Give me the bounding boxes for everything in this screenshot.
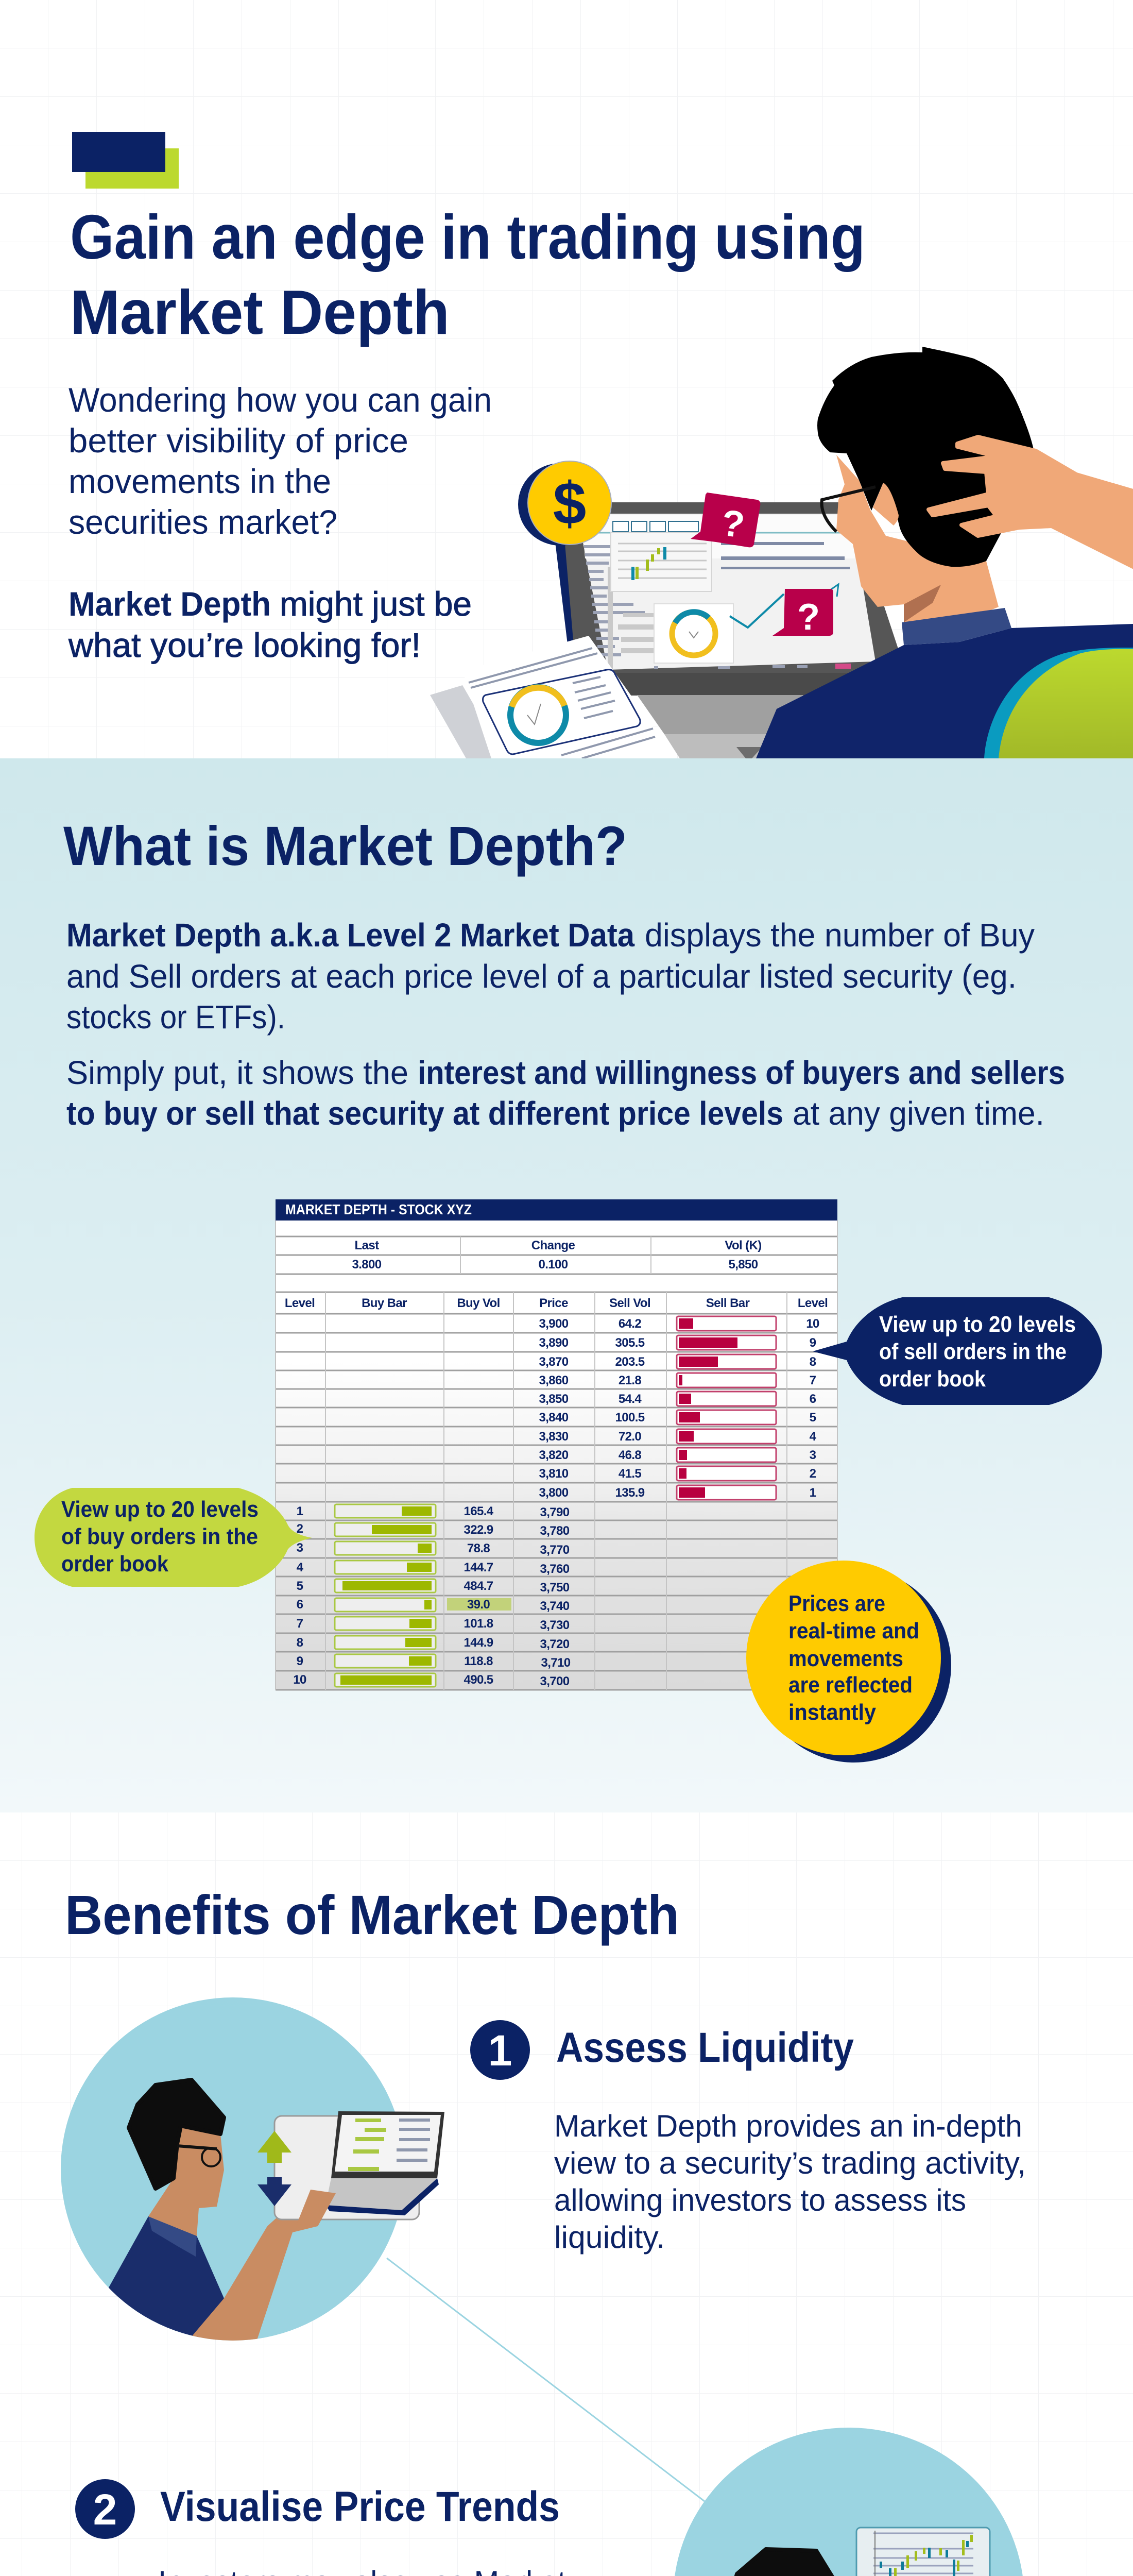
text block: definition <box>66 917 1035 1036</box>
icon: up arrow <box>258 2131 291 2163</box>
sell order rows: 3,900 <box>539 1317 569 1331</box>
summary row: Change <box>531 1239 575 1252</box>
buy order rows: 3,790 <box>540 1505 570 1519</box>
market depth table <box>276 1199 837 1690</box>
sell order rows: 10 <box>806 1317 819 1331</box>
column headers: Level <box>798 1296 828 1310</box>
buy order rows: 3,700 <box>540 1674 570 1688</box>
buy order rows: 165.4 <box>464 1504 494 1518</box>
icon: question bubble two <box>772 589 833 638</box>
buy order rows: 3,730 <box>540 1618 570 1632</box>
callout: real-time prices: instantly <box>788 1700 876 1725</box>
buy order rows: 490.5 <box>464 1673 493 1687</box>
sell order rows: 9 <box>810 1336 816 1350</box>
column headers: Buy Bar <box>362 1296 407 1310</box>
buy order rows: 144.7 <box>464 1561 493 1574</box>
sell order rows: 4 <box>810 1430 817 1444</box>
summary row: Last <box>355 1239 379 1252</box>
icon: laptop with order table <box>325 2111 444 2215</box>
number badge 1 <box>470 2020 530 2080</box>
text block: simply put: to buy or sell that security at different price levels <box>66 1095 783 1132</box>
body text <box>554 2109 1026 2255</box>
callout: sell orders: order book <box>879 1366 986 1392</box>
buy order rows: 3,740 <box>540 1599 570 1613</box>
icon: stock chart card <box>856 2528 990 2576</box>
icon: question bubble two: ? <box>797 597 820 638</box>
icon: question bubble one: ? <box>719 502 747 546</box>
summary row: 3.800 <box>352 1258 382 1272</box>
intro text: better visibility of price <box>68 421 408 460</box>
sell order rows: 21.8 <box>619 1374 641 1387</box>
sell order rows: 3,820 <box>539 1448 569 1462</box>
sell order rows: 64.2 <box>619 1317 641 1331</box>
title: Gain an edge in trading using <box>70 202 865 272</box>
sell order rows: 100.5 <box>615 1411 645 1425</box>
intro text: Market Depth <box>68 585 271 623</box>
sell order rows: 72.0 <box>619 1430 641 1444</box>
column headers <box>285 1296 828 1310</box>
callout: sell orders: of sell orders in the <box>879 1339 1067 1364</box>
column headers: Sell Vol <box>609 1296 650 1310</box>
table level numbers beside the buy callout: 2 <box>297 1522 303 1536</box>
callout: real-time prices: real-time and <box>788 1618 919 1643</box>
intro text: securities market? <box>68 503 337 541</box>
column headers: Buy Vol <box>457 1296 500 1310</box>
buy order rows: 1 <box>297 1504 303 1518</box>
sell order rows: 3,890 <box>539 1336 569 1350</box>
sell order rows: 135.9 <box>615 1486 645 1500</box>
body text: liquidity. <box>554 2220 665 2255</box>
column headers: Price <box>539 1296 568 1310</box>
laptop <box>555 502 899 758</box>
icon: down arrow <box>258 2177 291 2206</box>
illustration: benefit two, trader looking at chart <box>673 2428 1024 2576</box>
callout: sell orders <box>813 1297 1102 1405</box>
sell order rows: 3,830 <box>539 1430 569 1444</box>
heading: benefits: Benefits of Market Depth <box>65 1884 679 1946</box>
buy order rows: 322.9 <box>464 1523 493 1537</box>
body text: allowing investors to assess its <box>554 2183 966 2217</box>
summary row <box>352 1239 762 1272</box>
buy order rows: 3,720 <box>540 1637 570 1651</box>
sell order rows: 2 <box>810 1467 816 1481</box>
table level numbers beside the buy callout <box>297 1522 303 1555</box>
table level numbers beside the buy callout: 3 <box>297 1541 303 1555</box>
buy order rows: 3,770 <box>540 1543 570 1557</box>
icon: dollar coin: $ <box>553 470 586 537</box>
buy order rows: 78.8 <box>467 1541 490 1555</box>
buy order rows: 101.8 <box>464 1617 493 1631</box>
buy order rows: 6 <box>297 1598 303 1612</box>
callout: buy orders: View up to 20 levels <box>61 1497 259 1522</box>
body text: view to a security’s trading activity, <box>554 2146 1026 2180</box>
buy order rows: 484.7 <box>464 1579 493 1593</box>
sell order rows: 54.4 <box>619 1392 642 1406</box>
sell order rows: 3,870 <box>539 1355 569 1369</box>
buy order rows: 4 <box>297 1561 304 1574</box>
sell order rows: 41.5 <box>619 1467 641 1481</box>
summary row: 5,850 <box>728 1258 758 1272</box>
table header bar: MARKET DEPTH - STOCK XYZ <box>285 1201 472 1217</box>
title: Market Depth <box>70 277 450 347</box>
text block: definition: stocks or ETFs). <box>66 998 285 1036</box>
buy order rows: 3,780 <box>540 1524 570 1538</box>
text block: definition: and Sell orders at each price level of a particular listed security (eg. <box>66 958 1017 995</box>
intro text <box>68 381 492 664</box>
text block: definition: displays the number of Buy <box>645 917 1035 954</box>
sell order rows: 3,800 <box>539 1486 569 1500</box>
sell order rows: 3,860 <box>539 1374 569 1387</box>
icon: order book panel <box>274 2116 419 2219</box>
buy order rows: 9 <box>297 1654 303 1668</box>
buy order rows <box>293 1504 571 1688</box>
sell order rows: 305.5 <box>615 1336 645 1350</box>
number badge 1: 1 <box>488 2026 512 2075</box>
text block: simply put: interest and willingness of buyers and sellers <box>418 1054 1065 1091</box>
buy order rows: 3,710 <box>541 1656 571 1670</box>
sell order rows: 3,850 <box>539 1392 569 1406</box>
text block: simply put <box>66 1054 1065 1132</box>
buy order rows: 118.8 <box>464 1654 493 1668</box>
column headers: Sell Bar <box>706 1296 750 1310</box>
panel: what is market depth <box>0 758 1133 1812</box>
sell order rows: 5 <box>810 1411 816 1425</box>
callout: real-time prices: are reflected <box>788 1672 913 1698</box>
sell order rows: 6 <box>810 1392 816 1406</box>
hero illustration: laptop and thinking trader <box>430 347 1133 758</box>
sell order rows: 203.5 <box>615 1355 645 1369</box>
icon: dollar coin <box>518 461 611 546</box>
buy order rows: 5 <box>297 1579 303 1593</box>
callout: real-time prices: movements <box>788 1646 903 1671</box>
text block: simply put: at any given time. <box>793 1095 1044 1132</box>
connector line: benefit one to benefit two <box>387 2258 705 2501</box>
logo block <box>72 132 179 189</box>
buy order rows: 7 <box>297 1617 303 1631</box>
sell order rows: 46.8 <box>619 1448 641 1462</box>
buy order rows: 3,760 <box>540 1562 570 1576</box>
callout: buy orders <box>35 1488 312 1587</box>
sell order rows <box>539 1316 819 1500</box>
text block: simply put: Simply put, it shows the <box>66 1054 408 1091</box>
trader <box>756 347 1133 758</box>
intro text: might just be <box>280 585 472 623</box>
buy order rows: 10 <box>293 1673 306 1687</box>
summary row: Vol (K) <box>725 1239 762 1252</box>
callout: buy orders: order book <box>61 1551 168 1577</box>
callout: buy orders: of buy orders in the <box>61 1524 258 1549</box>
sell order rows: 1 <box>810 1486 816 1500</box>
column headers: Level <box>285 1296 315 1310</box>
benefit two text <box>75 2479 572 2576</box>
icon: documents <box>430 636 676 758</box>
heading: what is market depth: What is Market Depth? <box>63 815 627 877</box>
intro text: movements in the <box>68 462 331 500</box>
heading: visualise price trends: Visualise Price Trends <box>160 2483 560 2530</box>
heading: assess liquidity: Assess Liquidity <box>556 2024 854 2071</box>
buy order rows: 3,750 <box>540 1581 570 1595</box>
intro text: what you’re looking for! <box>68 626 421 664</box>
body text: Market Depth provides an in-depth <box>554 2109 1022 2143</box>
sell order rows: 3,810 <box>539 1467 569 1481</box>
buy order rows: 39.0 <box>467 1598 490 1612</box>
sell order rows: 7 <box>810 1374 816 1387</box>
sell order rows: 3 <box>810 1448 816 1462</box>
benefit one text <box>470 2020 1026 2255</box>
sell order rows: 3,840 <box>539 1411 569 1425</box>
number badge 2 <box>75 2479 135 2539</box>
intro text: Wondering how you can gain <box>68 381 492 419</box>
number badge 2: 2 <box>93 2485 117 2534</box>
illustration: benefit one, trader with laptop <box>61 1997 444 2349</box>
callout: sell orders: View up to 20 levels <box>879 1312 1076 1337</box>
callout: real-time prices <box>746 1561 951 1762</box>
table header bar <box>276 1199 837 1221</box>
buy order rows: 8 <box>297 1636 303 1650</box>
buy order rows: 144.9 <box>464 1636 493 1650</box>
sell order rows: 8 <box>810 1355 816 1369</box>
summary row: 0.100 <box>538 1258 568 1272</box>
text block: definition: Market Depth a.k.a Level 2 Market Data <box>66 917 634 954</box>
icon: question bubble one <box>691 493 760 547</box>
title <box>70 202 865 347</box>
callout: real-time prices: Prices are <box>788 1591 885 1616</box>
